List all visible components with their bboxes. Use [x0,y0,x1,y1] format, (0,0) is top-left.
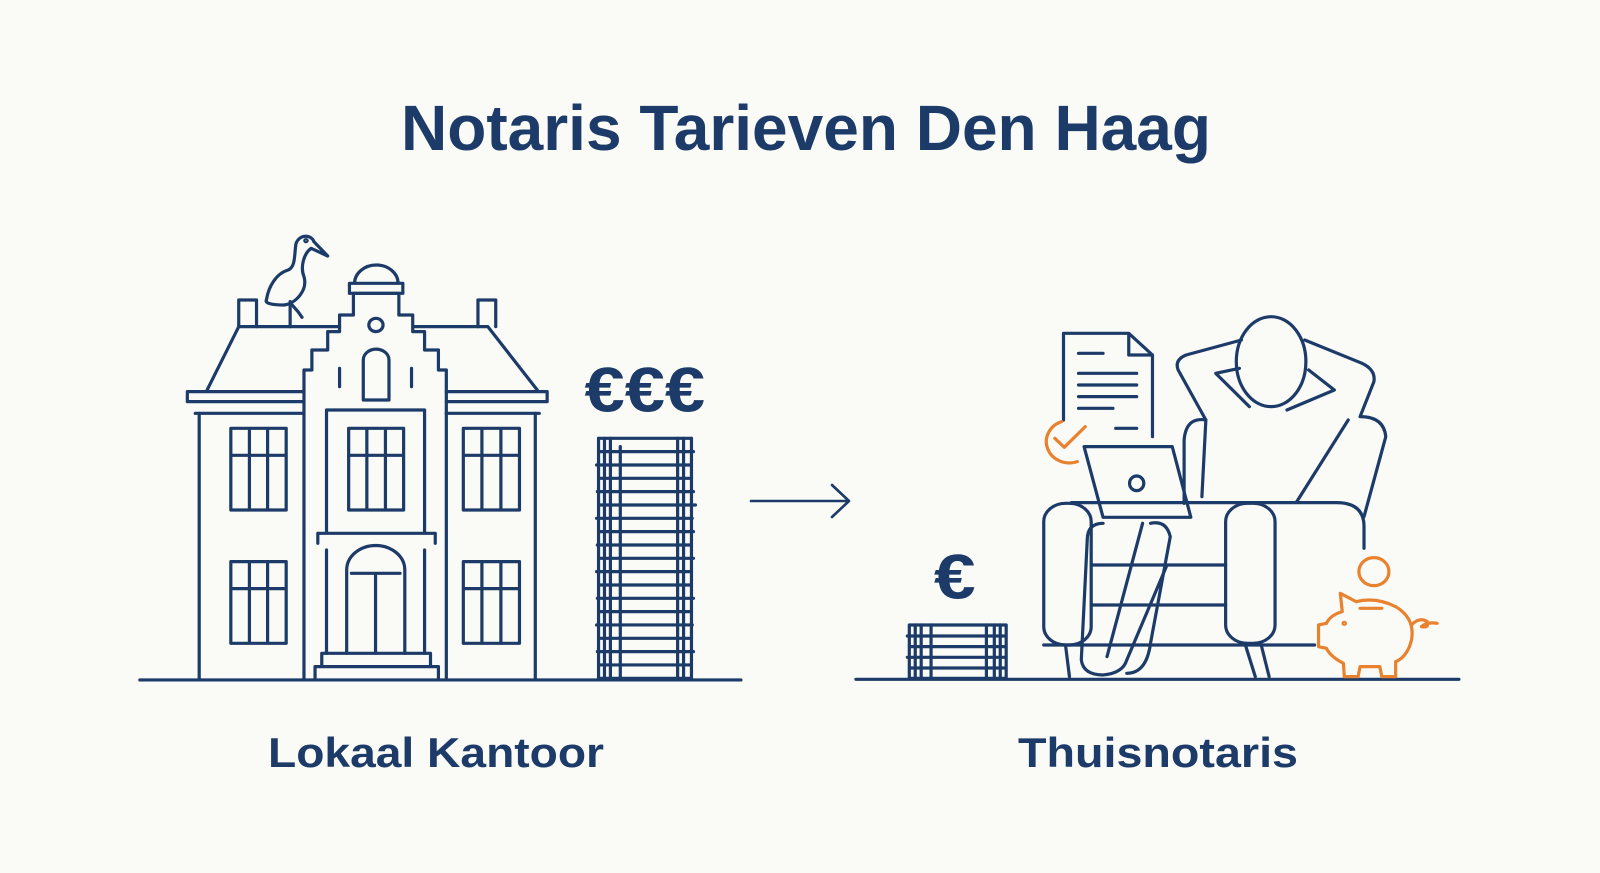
icon: small coin stack [907,625,1006,678]
text: euro sign large: €€€ [585,354,705,425]
panel: lokaal kantoor scene [140,236,741,680]
icon: armchair [1044,503,1364,677]
building [187,265,547,678]
panel: thuisnotaris scene [856,317,1459,679]
windows [231,428,519,643]
icon: laptop [1084,447,1191,517]
title: Notaris Tarieven Den Haag [401,92,1211,164]
label: lokaal kantoor: Lokaal Kantoor [268,729,604,776]
ground line left [140,678,741,682]
icon: piggy bank [1319,558,1437,677]
icon: tall coin stack [597,438,695,678]
ground line right [856,678,1459,681]
label: thuisnotaris: Thuisnotaris [1018,729,1298,776]
icon: relaxed person [1081,317,1386,675]
icon: document [1064,333,1152,437]
icon: orange check [1046,422,1085,463]
icon: stork [266,236,328,327]
arrow [751,485,849,517]
text: single euro: € [934,541,976,612]
